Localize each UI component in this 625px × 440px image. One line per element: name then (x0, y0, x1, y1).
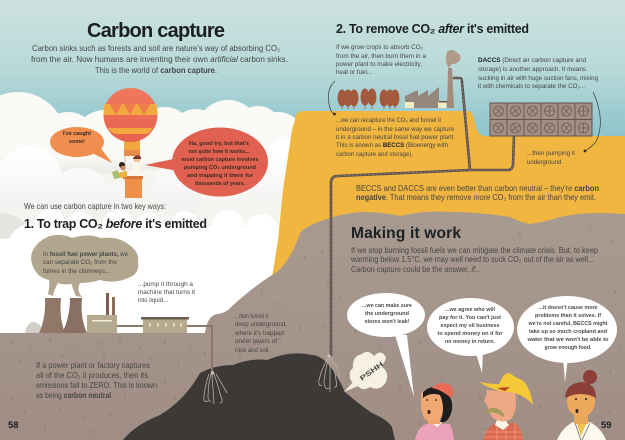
intro text: from the air. Now humans are inventing their own artificial carbon sinks. (31, 55, 288, 64)
speech bubble: stores leak: the underground (365, 311, 409, 317)
text: recapture BECCS: ...we can recapture the CO₂ and funnel it (336, 117, 441, 124)
speech bubble: good try: thousands of years. (195, 181, 245, 187)
heading: to trap CO2 before: 1. To trap CO₂ before it's emitted (24, 217, 207, 231)
text: carbon neutral: If a power plant or factory captures (36, 361, 150, 370)
intro text (31, 44, 288, 75)
text: carbon negative: negative. That means they remove more CO₂ from the air than they emit. (356, 193, 596, 202)
text: DACCS: storage) is another approach. It means (478, 66, 587, 73)
text: then pumping (527, 150, 575, 166)
icon: hot air balloon (104, 88, 158, 198)
text: recapture BECCS: underground – in the same way we capture (336, 126, 454, 133)
text: funnel it: under layers of (235, 338, 277, 345)
text: DACCS: it with chemicals to separate the CO₂... (478, 83, 585, 90)
icon: injection tendrils right (319, 354, 340, 392)
text: grow crops (336, 44, 426, 76)
text: grow crops: power plant to make electricity, (336, 61, 422, 68)
text: recapture BECCS: it in a carbon neutral fossil fuel power plant. (336, 134, 455, 141)
text: DACCS: sucking in air with huge suction fans, mixing (478, 75, 598, 82)
text: funnel it: deep underground, (235, 321, 287, 328)
smoke cloud callout: In fossil fuel power plants, we (43, 251, 128, 258)
speech bubble: more problems (517, 296, 617, 382)
text: funnel it (234, 313, 287, 354)
character: girl with red cap (415, 383, 454, 440)
speech bubble: stores leak (347, 293, 425, 397)
text: pump it: machine that turns it (138, 289, 195, 296)
speech bubble: more problems: water that we won't be able to (527, 337, 609, 343)
PSHH leak cloud: PSHH (359, 361, 385, 383)
speech bubble: who pays: no money in return. (445, 339, 495, 345)
text: funnel it: ...then funnel it (235, 313, 268, 320)
speech bubble: who pays: to spend money on it for (438, 331, 503, 337)
text: DACCS: DACCS (Direct air carbon capture and (478, 57, 586, 64)
speech bubble: good try (145, 128, 268, 196)
sky background (0, 0, 625, 140)
clouds (0, 92, 318, 340)
page number 59: 59 (601, 420, 612, 431)
speech bubble: I've caught some: I've caught (63, 131, 91, 137)
text: grow crops: heat or fuel... (336, 69, 372, 76)
text: grow crops: If we grow crops to absorb CO₂ (336, 44, 423, 51)
text: recapture BECCS: This is known as BECCS (Bioenergy with (336, 142, 448, 149)
rock texture marks (8, 225, 620, 434)
speech bubble: more problems: ...it doesn't cause more (538, 305, 598, 311)
text: recapture BECCS (336, 117, 455, 158)
speech bubble: who pays: pay for it. You can't just (439, 315, 501, 321)
character: man with yellow hat (479, 373, 533, 440)
intro text: This is the world of carbon capture. (95, 66, 217, 75)
text: recapture BECCS: carbon capture and storage). (336, 151, 413, 158)
speech bubble: who pays: expect my oil business (440, 323, 500, 329)
yellow land (270, 111, 625, 290)
text: pump it: ...pump it through a (138, 281, 193, 288)
text: DACCS (478, 57, 598, 90)
speech bubble: more problems: grow enough food. (544, 345, 592, 351)
text: then pumping: underground. (527, 159, 563, 166)
text: making it work intro: warming below 1.5°C, we may well need to suck CO₂ out of the air as well... (350, 255, 594, 264)
speech bubble: good try: and trapping it there for (187, 173, 254, 179)
page number 58: 58 (8, 420, 19, 431)
text: pump it (138, 281, 195, 304)
text: carbon neutral (36, 361, 157, 400)
text: carbon neutral: all of the CO₂ it produces, then its (36, 371, 148, 380)
text: then pumping: ...then pumping it (527, 150, 575, 157)
speech bubble: more problems: we're not careful, BECCS might (528, 321, 608, 327)
arrow: DACCS to underground (584, 92, 600, 152)
speech bubble: more problems: take up so much cropland and (529, 329, 607, 335)
PSHH leak cloud (344, 352, 387, 392)
text: carbon neutral: emissions fall to ZERO. This is known (36, 381, 157, 390)
heading: making it work: Making it work (351, 225, 461, 242)
character: woman with hair bun (557, 370, 606, 440)
speech bubble: I've caught some: some! (69, 139, 85, 145)
title: Carbon capture (87, 20, 225, 42)
heading: to remove CO2 after: 2. To remove CO₂ after it's emitted (336, 22, 529, 36)
text: funnel it: where it's trapped (234, 330, 284, 337)
speech bubble: stores leak: ...we can make sure (362, 303, 413, 309)
speech bubble: who pays (427, 298, 514, 373)
underground pipes (331, 78, 514, 355)
speech bubble: who pays: ...we agree who will (445, 307, 495, 313)
arrow: crops to recapture (328, 81, 336, 115)
bioenergy power plant (405, 50, 460, 108)
smoke cloud callout (31, 235, 138, 297)
speech bubble: good try: most carbon capture involves (182, 157, 258, 163)
speech bubble: good try: not quite how it works... (188, 149, 250, 155)
DACCS fan grid (490, 103, 592, 136)
text: making it work intro (350, 246, 598, 274)
text: making it work intro: If we stop burning fossil fuels we can mitigate the climate crisis. But, to keep (351, 246, 598, 255)
icon: tree row (338, 88, 400, 109)
grey rock ground (0, 212, 625, 440)
text: pump it: into liquid... (138, 297, 168, 304)
black carbon store mound (123, 353, 395, 440)
speech bubble: good try: pumping CO₂ underground (184, 165, 257, 171)
icon: injection tendrils left (204, 372, 227, 404)
smoke cloud callout: fumes in the chimneys... (43, 268, 110, 275)
text: making it work intro: Carbon capture could be the answer, if... (351, 265, 481, 274)
fossil fuel power plant (25, 293, 212, 373)
text: two key ways: We can use carbon capture in two key ways: (24, 202, 166, 211)
text: carbon neutral: as being carbon neutral. (36, 391, 113, 400)
speech bubble: stores leak: stores won't leak! (364, 319, 410, 325)
intro text: Carbon sinks such as forests and soil are nature's way of absorbing CO₂ (32, 44, 280, 53)
text: grow crops: from the air, then burn them in a (336, 53, 426, 60)
speech bubble: I've caught some (50, 127, 112, 163)
smoke cloud callout: can separate CO₂ from the (43, 259, 117, 266)
speech bubble: more problems: problems than it solves. If (535, 313, 601, 319)
text: carbon negative: BECCS and DACCS are even better than carbon neutral – they're carbon (356, 184, 599, 193)
text: funnel it: rock and soil. (235, 347, 270, 354)
speech bubble: good try: Ha, good try, but that's (189, 141, 249, 147)
text: carbon negative (356, 184, 599, 202)
